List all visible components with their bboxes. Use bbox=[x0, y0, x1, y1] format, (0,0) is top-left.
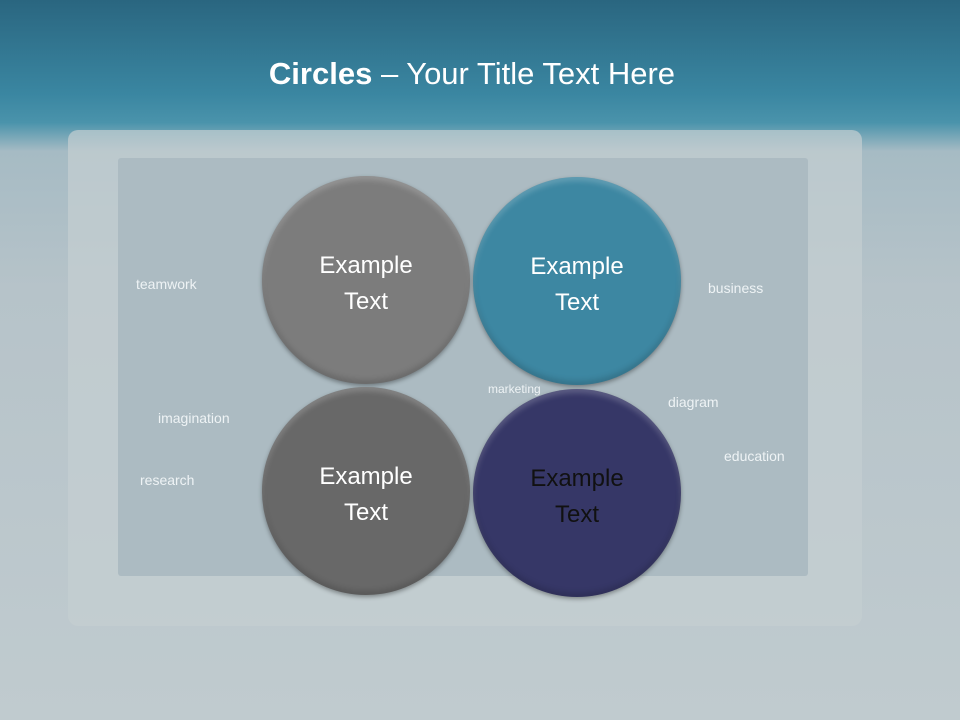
circle: top-right teal bbox=[473, 177, 681, 385]
circle: top-left gray: Text bbox=[344, 288, 388, 315]
sketch words: teamwork bbox=[136, 276, 197, 292]
circle: bottom-right navy: Example bbox=[530, 465, 624, 492]
tablet screen with sketches: diagram bbox=[668, 394, 719, 410]
tablet screen with sketches: imagination bbox=[158, 410, 230, 426]
circle: top-right teal: Text bbox=[555, 289, 599, 316]
circle: bottom-right navy bbox=[473, 389, 681, 597]
tablet screen with sketches bbox=[118, 158, 808, 576]
title: Circles – Your Title Text Here bbox=[269, 56, 675, 91]
tablet screen with sketches: marketing bbox=[488, 382, 541, 396]
circle: top-left gray: Example bbox=[319, 252, 413, 279]
circle: bottom-left dark gray: Example bbox=[319, 463, 413, 490]
circle: bottom-right navy: Text bbox=[555, 501, 599, 528]
tablet screen with sketches: education bbox=[724, 448, 785, 464]
circle: top-left gray bbox=[262, 176, 470, 384]
tablet screen with sketches: research bbox=[140, 472, 194, 488]
tablet frame bbox=[68, 130, 862, 626]
circle: top-right teal: Example bbox=[530, 253, 624, 280]
tablet screen with sketches: business bbox=[708, 280, 763, 296]
circle: bottom-left dark gray bbox=[262, 387, 470, 595]
circle: bottom-left dark gray: Text bbox=[344, 499, 388, 526]
